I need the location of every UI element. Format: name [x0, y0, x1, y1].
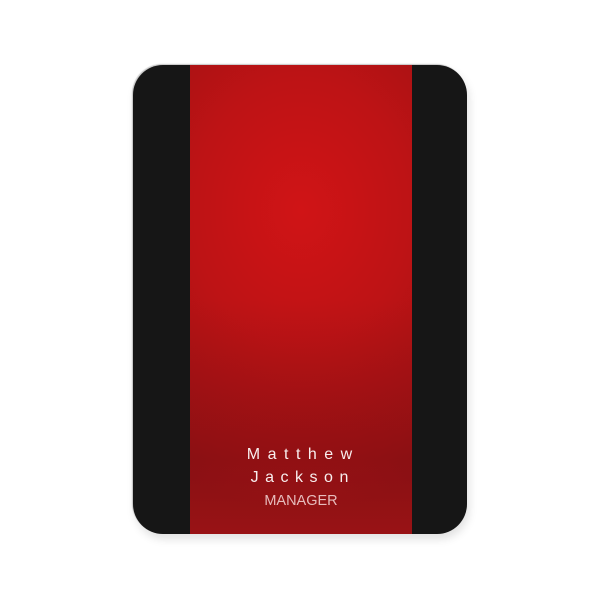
text: last name: Jackson: [251, 469, 355, 486]
panel: red gradient band: [190, 65, 412, 534]
text: job title: MANAGER: [264, 493, 338, 509]
text: first name: Matthew: [247, 446, 360, 463]
panel: business card: [133, 65, 467, 534]
